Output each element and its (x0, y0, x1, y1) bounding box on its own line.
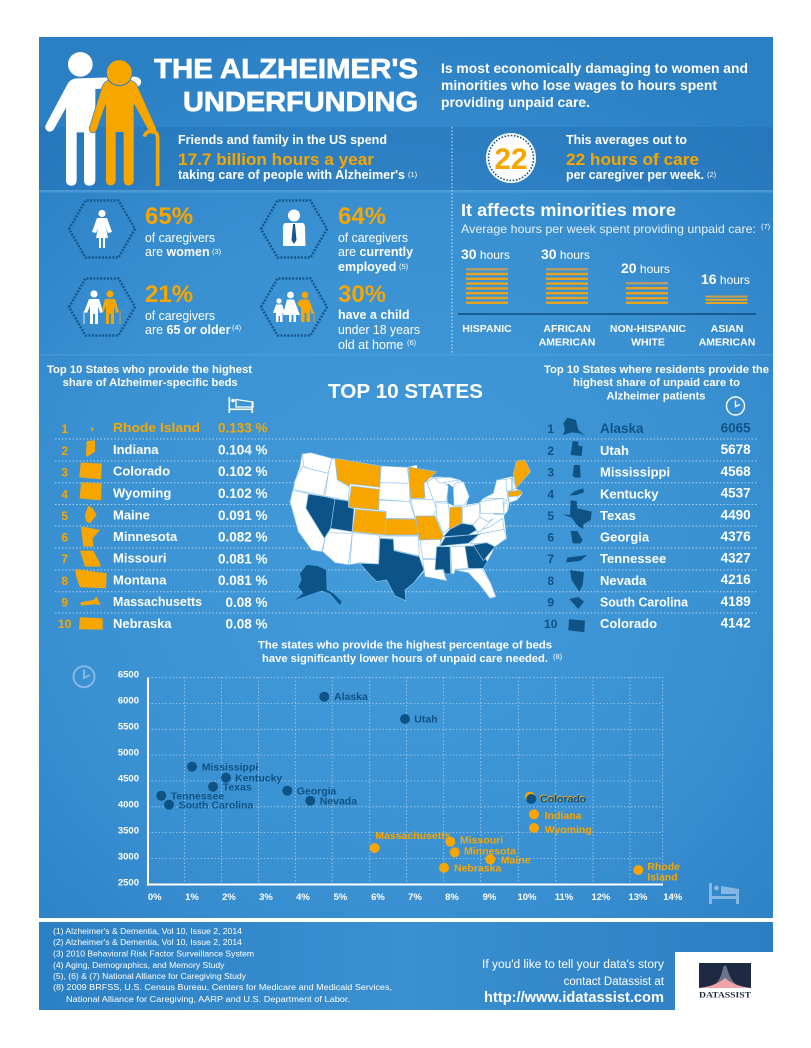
row: Missouri: Missouri (113, 550, 166, 566)
y axis labels: 3000 (118, 852, 139, 862)
data points: bed share states: Massachusetts (375, 830, 451, 842)
row: Mississippi: Mississippi (600, 464, 670, 480)
row: Missouri: 7 (61, 552, 68, 566)
stat: 21% 65 or older (69, 278, 242, 337)
references: (5), (6) & (7) National Alliance for Caregiving Study (53, 971, 247, 981)
x axis labels: 14% (663, 892, 683, 903)
row: Nevada: 4216 (721, 572, 751, 587)
row: Georgia (547, 529, 751, 544)
row: Colorado: 4142 (721, 616, 751, 630)
y axis labels: 4500 (118, 774, 139, 784)
row: Mississippi: 4568 (721, 464, 751, 479)
list: beds by state (58, 420, 268, 632)
data points: unpaid care states (156, 691, 438, 812)
row: Colorado (61, 462, 268, 480)
row: Tennessee (547, 550, 751, 566)
data points: bed share states (370, 792, 680, 884)
row: Indiana: Indiana (113, 442, 159, 457)
icon: clock axis marker (74, 666, 94, 687)
row: Massachusetts: 9 (61, 596, 68, 610)
stat: 21% 65 or older: 21% (145, 281, 193, 308)
row: Rhode Island: 0.133 % (218, 420, 268, 436)
row: Nebraska: 10 (58, 617, 72, 631)
row: Rhode Island: 1 (61, 422, 68, 436)
row: Georgia: 6 (547, 530, 554, 544)
bar: African American: 30 hours (541, 246, 590, 262)
title (154, 53, 418, 117)
heading: it affects minorities more (461, 200, 771, 236)
summary band background (39, 127, 773, 190)
chart caption: have significantly lower hours of unpaid care needed. (262, 653, 548, 665)
data points: unpaid care states: Nevada (320, 795, 357, 807)
y axis labels: 2500 (118, 878, 139, 888)
callout: 22 hours of care (566, 133, 717, 182)
icon: clock (726, 397, 744, 415)
y axis labels: 4000 (118, 800, 139, 810)
row: Texas: 5 (547, 509, 554, 523)
data points: bed share states: Missouri (460, 835, 503, 847)
row: Minnesota: 6 (61, 530, 68, 544)
y axis labels: 5000 (118, 748, 139, 758)
row: Utah (547, 441, 751, 458)
icon: 22 badge (486, 133, 536, 183)
x axis labels: 2% (222, 892, 236, 903)
y axis labels: 6000 (118, 696, 139, 706)
x axis labels: 5% (334, 892, 348, 903)
intro text: minorities who lose wages to hours spent (441, 77, 717, 93)
row: Kentucky: 4 (547, 488, 554, 502)
data points: unpaid care states: Texas (223, 782, 252, 794)
row: Alaska (547, 418, 751, 437)
row: Massachusetts: Massachusetts (113, 594, 202, 609)
row: Rhode Island: Rhode Island (113, 420, 200, 435)
row: Maine: 0.091 % (218, 508, 268, 523)
main panel background (39, 37, 773, 918)
row: Rhode Island (61, 420, 268, 436)
bar: Asian American: ASIAN (711, 323, 743, 335)
row: Nebraska: 0.08 % (225, 616, 268, 632)
row: Nevada: Nevada (600, 573, 647, 588)
heading: unpaid care list: Alzheimer patients (606, 391, 706, 403)
callout: 22 hours of care: This averages out to (566, 133, 687, 147)
row: Tennessee: Tennessee (600, 551, 666, 566)
bar: African American (539, 246, 595, 348)
chart caption: (8) (553, 652, 563, 661)
x axis labels: 0% (148, 892, 162, 903)
row: South Carolina (547, 594, 751, 610)
call to action: http://www.idatassist.com (484, 989, 664, 1006)
row: Wyoming: 0.102 % (218, 486, 268, 501)
data points: bed share states: Wyoming (545, 824, 592, 836)
row: Utah: 5678 (721, 442, 751, 457)
bar: Hispanic (461, 246, 512, 335)
row: Indiana: 2 (61, 444, 68, 458)
data points: unpaid care states: Alaska (334, 691, 368, 703)
title: UNDERFUNDING (183, 86, 418, 117)
bar: Non-Hispanic White: 20 hours (621, 260, 670, 276)
x axis labels: 8% (445, 892, 459, 903)
stat: 64% employed: employed (338, 260, 396, 274)
stat: 30% child at home: (6) (407, 338, 417, 347)
map: United States (290, 453, 531, 605)
bar chart: hours by ethnicity (458, 246, 756, 348)
row: Tennessee: 4327 (721, 550, 751, 566)
data points: unpaid care states: Utah (414, 714, 438, 726)
row: Nevada (547, 570, 751, 592)
row: Georgia: 4376 (721, 529, 751, 544)
stat: 64% employed (261, 200, 413, 274)
stat: 30% child at home: old at home (338, 338, 403, 352)
references: (1) Alzheimer's & Dementia, Vol 10, Issue 2, 2014 (53, 926, 242, 936)
row: Utah: 2 (547, 444, 554, 458)
row: Alaska: 1 (547, 422, 554, 436)
icon: bed axis marker (709, 883, 739, 904)
heading: it affects minorities more: (7) (761, 222, 771, 231)
data points: bed share states: Indiana (545, 810, 582, 822)
row: Colorado: 10 (544, 617, 558, 631)
stat: 65% women: of caregivers (145, 231, 215, 245)
bar: African American: AMERICAN (539, 336, 595, 348)
bar: Asian American: 16 hours (701, 271, 750, 287)
heading: beds list (47, 364, 252, 389)
y axis labels: 3500 (118, 826, 139, 836)
x axis labels: 3% (259, 892, 273, 903)
heading: beds list: share of Alzheimer-specific beds (63, 377, 238, 389)
row: Nebraska (58, 616, 268, 632)
row: Texas (547, 500, 751, 529)
row: Georgia: Georgia (600, 530, 650, 544)
row: Texas: 4490 (721, 508, 751, 522)
data points: bed share states: Rhode (647, 861, 680, 873)
chart caption: The states who provide the highest percentage of beds (258, 640, 552, 652)
bar: Hispanic: HISPANIC (462, 323, 512, 335)
x axis labels: 6% (371, 892, 385, 903)
bar: Hispanic: 30 hours (461, 246, 510, 262)
callout: 17.7 billion hours: Friends and family in the US spend (178, 133, 387, 147)
row: Mississippi (547, 464, 751, 480)
row: Colorado: 3 (61, 466, 68, 480)
bar: Non-Hispanic White: WHITE (631, 336, 665, 348)
x axis labels: 12% (591, 892, 611, 903)
heading: it affects minorities more: Average hours per week spent providing unpaid care: (461, 222, 756, 236)
stat: 30% child at home: have a child (338, 308, 410, 322)
row: Massachusetts (61, 594, 268, 610)
row: Minnesota: Minnesota (113, 529, 178, 544)
call to action (482, 959, 665, 1006)
callout: 17.7 billion hours (178, 133, 418, 182)
row: Alaska: Alaska (600, 421, 644, 436)
row: Missouri (61, 550, 268, 567)
callout: 22 hours of care: per caregiver per week. (566, 168, 704, 182)
stat: 64% employed: (5) (399, 262, 409, 271)
bar: Asian American (699, 271, 755, 348)
row: South Carolina: 9 (547, 596, 554, 610)
x axis labels (148, 892, 683, 903)
row: Massachusetts: 0.08 % (225, 595, 268, 610)
list: unpaid care by state (544, 418, 751, 632)
row: Montana: 0.081 % (218, 573, 268, 588)
title: THE ALZHEIMER'S (154, 53, 418, 84)
stat: 30% child at home: under 18 years (338, 323, 420, 337)
stat: 30% child at home: 30% (338, 281, 386, 308)
icon: 22 badge: 22 (494, 143, 528, 176)
x axis labels: 10% (517, 892, 537, 903)
bar: Non-Hispanic White: NON-HISPANIC (610, 323, 687, 335)
row: Maine: Maine (113, 508, 150, 522)
row: South Carolina: 4189 (721, 594, 751, 609)
call to action: contact Datassist at (564, 976, 665, 988)
intro text (441, 60, 748, 110)
row: Minnesota: 0.082 % (218, 530, 268, 544)
call to action: If you'd like to tell your data's story (482, 959, 664, 971)
heading: unpaid care list (544, 364, 769, 403)
row: Wyoming: 4 (61, 488, 68, 502)
stat: 64% employed: 64% (338, 203, 386, 230)
bar: Asian American: AMERICAN (699, 336, 755, 348)
row: Maine (61, 506, 268, 523)
y axis labels: 6500 (118, 670, 139, 680)
callout: 22 hours of care: (2) (707, 170, 717, 179)
logo: Datassist: DATASSIST (699, 990, 751, 1000)
data points: unpaid care states: South Carolina (179, 800, 254, 812)
row: Colorado: Colorado (600, 616, 657, 631)
stat: 65% women: are women (145, 245, 210, 259)
stat: 30% child at home (261, 278, 420, 352)
row: Utah: Utah (600, 443, 629, 458)
row: Texas: Texas (600, 508, 636, 523)
data point: Colorado unpaid care: Colorado (540, 793, 586, 805)
stat: 21% 65 or older: are 65 or older (145, 323, 231, 337)
callout: 22 hours of care: 22 hours of care (566, 150, 699, 169)
data points: unpaid care states: Tennessee (171, 790, 224, 802)
row: Nevada: 8 (547, 574, 554, 588)
references: (8) 2009 BRFSS, U.S. Census Bureau, Centers for Medicare and Medicaid Services, (53, 982, 392, 992)
row: South Carolina: South Carolina (600, 594, 689, 610)
references: (4) Aging, Demographics, and Memory Study (53, 960, 225, 970)
row: Kentucky (547, 486, 751, 502)
data points: bed share states: Island (647, 872, 678, 884)
x axis labels: 9% (483, 892, 497, 903)
x axis labels: 13% (628, 892, 648, 903)
logo: Datassist (699, 963, 751, 1000)
x axis labels: 7% (408, 892, 422, 903)
intro text: providing unpaid care. (441, 94, 590, 110)
stat: 21% 65 or older: (4) (232, 323, 242, 332)
stat: 21% 65 or older: of caregivers (145, 309, 215, 323)
footer panel (39, 922, 773, 1010)
row: Nebraska: Nebraska (113, 616, 172, 631)
scatter chart (118, 670, 683, 903)
data points: unpaid care states: Mississippi (202, 762, 258, 774)
row: Kentucky: Kentucky (600, 486, 659, 502)
row: Montana: Montana (113, 572, 167, 588)
x axis labels: 11% (555, 892, 574, 903)
data points: unpaid care states: Georgia (297, 785, 337, 797)
chart caption (258, 640, 563, 665)
row: Indiana: 0.104 % (218, 442, 268, 457)
row: Mississippi: 3 (547, 466, 554, 480)
callout: 17.7 billion hours: 17.7 billion hours a year (178, 150, 374, 169)
bar: African American: AFRICAN (543, 323, 591, 335)
icon: bed (228, 397, 253, 413)
row: Wyoming (61, 482, 268, 502)
x axis labels: 1% (185, 892, 199, 903)
row: Montana (61, 569, 268, 588)
references: (3) 2010 Behavioral Risk Factor Surveillance System (53, 948, 254, 958)
y axis labels: 5500 (118, 722, 139, 732)
stat: 64% employed: of caregivers (338, 231, 408, 245)
x axis labels: 4% (296, 892, 310, 903)
intro text: Is most economically damaging to women and (441, 60, 748, 76)
callout: 17.7 billion hours: taking care of people with Alzheimer's (178, 168, 405, 182)
data points: bed share states: Minnesota (464, 845, 516, 857)
callout: 17.7 billion hours: (1) (408, 170, 418, 179)
stat: 64% employed: are currently (338, 245, 413, 259)
row: Indiana (61, 440, 268, 458)
row: Kentucky: 4537 (721, 486, 751, 500)
heading: top 10 states: TOP 10 STATES (328, 381, 483, 403)
row: Wyoming: Wyoming (113, 486, 171, 500)
row: Colorado (544, 616, 751, 632)
icon: caregiver with elderly person using a cane (45, 52, 158, 186)
row: Tennessee: 7 (547, 552, 554, 566)
heading: unpaid care list: highest share of unpaid care to (573, 377, 740, 389)
row: Montana: 8 (61, 574, 68, 588)
row: Minnesota (61, 527, 268, 547)
y axis labels (118, 670, 139, 888)
row: Maine: 5 (61, 509, 68, 523)
bar: Non-Hispanic White (610, 260, 687, 348)
heading: beds list: Top 10 States who provide the highest (47, 364, 252, 376)
data points: bed share states: Colorado (540, 792, 586, 804)
row: Colorado: Colorado (113, 464, 170, 478)
stat: 65% women: (3) (212, 247, 222, 256)
row: Alaska: 6065 (721, 420, 751, 436)
heading: it affects minorities more: It affects minorities more (461, 200, 676, 220)
stat: 65% women: 65% (145, 203, 193, 230)
row: Colorado: 0.102 % (218, 464, 268, 479)
references (53, 926, 392, 1004)
data points: bed share states: Maine (501, 854, 531, 866)
data points: bed share states: Nebraska (454, 862, 501, 874)
references: (2) Alzheimer's & Dementia, Vol 10, Issue 2, 2014 (53, 937, 242, 947)
data points: unpaid care states: Kentucky (235, 773, 282, 785)
heading: unpaid care list: Top 10 States where residents provide the (544, 364, 769, 376)
row: Missouri: 0.081 % (218, 552, 268, 566)
stat: 65% women (69, 200, 222, 259)
references: National Alliance for Caregiving, AARP and U.S. Department of Labor. (66, 994, 350, 1004)
